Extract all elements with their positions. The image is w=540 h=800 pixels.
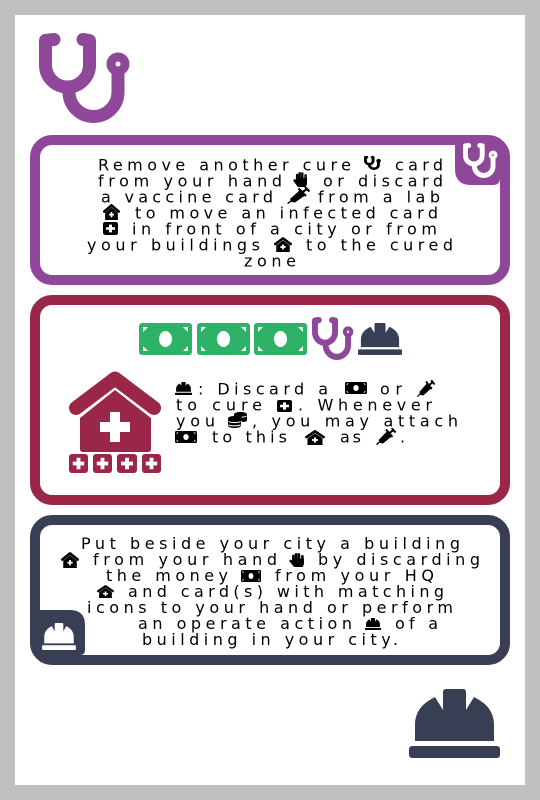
text block: build instructions: the money (106, 566, 228, 585)
text block: build instructions: from your hand (93, 550, 277, 569)
text block: operate ability: , you may attach (252, 412, 458, 430)
text block: build instructions: and card(s) with matching (128, 582, 444, 601)
text block: operate ability: . Whenever (298, 396, 432, 414)
text block: build instructions: icons to your hand or perform (87, 598, 453, 617)
text block: build instructions: of a (395, 614, 438, 633)
text block: build instructions: from your HQ (275, 566, 434, 585)
text block: operate ability: you (176, 412, 215, 430)
text block: cure instructions: from your hand (98, 172, 282, 190)
text block: build instructions: Put beside your city a building (81, 534, 460, 553)
text block: operate ability: to this (212, 428, 287, 446)
text block: operate ability (175, 380, 458, 446)
text block: build instructions: by discarding (318, 550, 480, 569)
text block: operate ability: to cure (176, 396, 262, 414)
text block: cure instructions: Remove another cure (98, 156, 351, 174)
text block: cure instructions: from a lab (318, 188, 440, 206)
text block: cure instructions: your buildings (87, 236, 260, 254)
icon: large hard hat (409, 689, 500, 758)
tab: stethoscope corner (455, 138, 500, 185)
text block: cure instructions: in front of a city or from (132, 220, 437, 238)
panel: cure action (35, 138, 505, 280)
text block: build instructions (62, 534, 480, 649)
icon: large purple stethoscope (46, 40, 130, 116)
text block: cure instructions: card (395, 156, 443, 174)
text block: cure instructions: to the cured (306, 236, 453, 254)
text block: build instructions: an operate action (138, 614, 352, 633)
text block: cure instructions (87, 156, 453, 270)
text block: cure instructions: or discard (323, 172, 443, 190)
panel: treat action (35, 300, 505, 500)
text block: operate ability: : Discard a (198, 380, 328, 398)
icon row: cost (139, 320, 402, 357)
text block: build instructions: building in your city. (142, 630, 398, 649)
icon: lab building with cross (69, 378, 161, 473)
text block: operate ability: or (380, 380, 402, 398)
text block: operate ability: as (340, 428, 361, 446)
text block: cure instructions: zone (244, 252, 296, 270)
panel: build action (35, 520, 505, 662)
text block: cure instructions: to move an infected card (135, 204, 438, 222)
tab: hard hat corner (40, 610, 85, 662)
text block: cure instructions: a vaccine card (101, 188, 273, 206)
text block: operate ability: . (400, 428, 405, 446)
